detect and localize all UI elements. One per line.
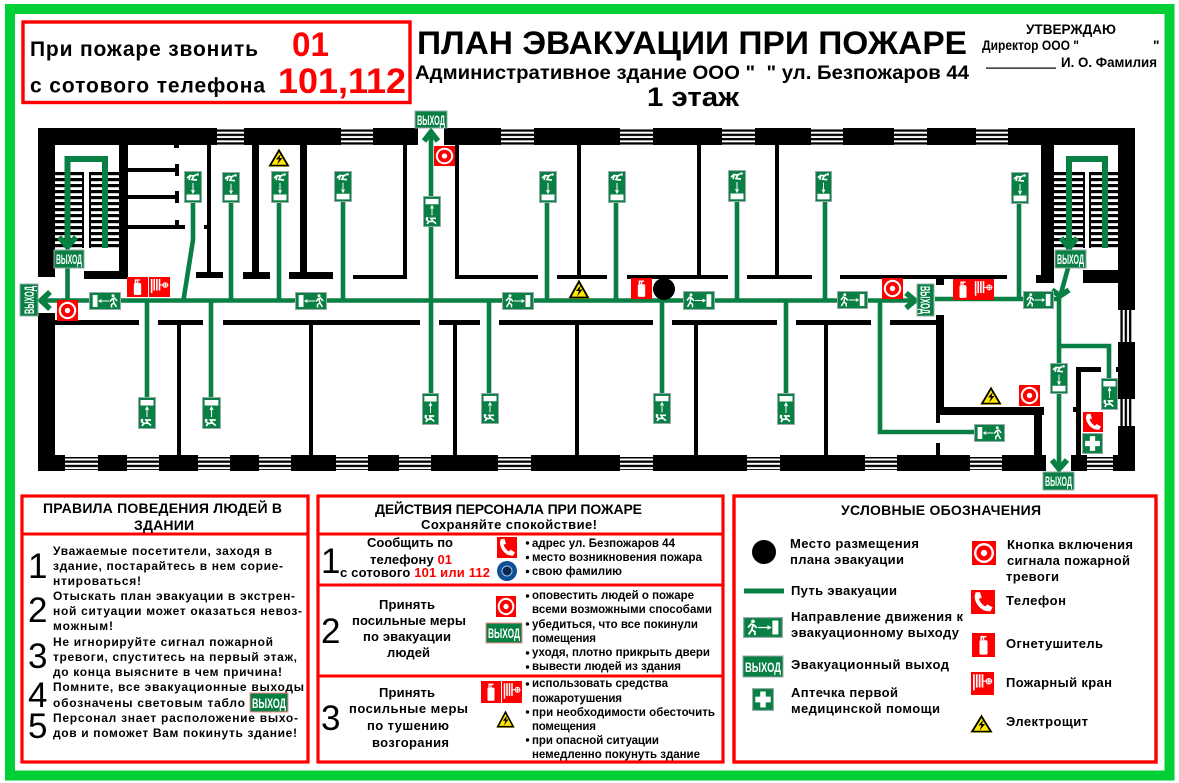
panel: staff actions: пожаротушения xyxy=(532,693,622,705)
panel: staff actions: вывести людей из здания xyxy=(532,661,681,673)
panel: behaviour rules: Персонал знает расположение выхо- xyxy=(53,711,298,725)
title: ПЛАН ЭВАКУАЦИИ ПРИ ПОЖАРЕ xyxy=(417,25,967,61)
panel: behaviour rules: 4 xyxy=(28,676,47,715)
subtitle: floor: 1 этаж xyxy=(647,82,740,112)
panel: staff actions: помещения xyxy=(532,721,596,733)
panel: staff actions: оповестить людей о пожаре xyxy=(532,590,694,602)
panel: staff actions: Принять xyxy=(379,597,435,612)
panel: behaviour rules: Не игнорируйте сигнал пожарной xyxy=(53,635,273,649)
emergency call box xyxy=(23,22,410,102)
panel: behaviour rules: Отыскать план эвакуации в экстрен- xyxy=(53,589,295,603)
panel: staff actions: всеми возможными способами xyxy=(532,604,712,616)
panel: staff actions: телефону 01 xyxy=(370,552,452,567)
emergency call box: с сотового телефона xyxy=(30,74,265,98)
panel: staff actions: посильные меры xyxy=(349,701,468,716)
panel: behaviour rules: 1 xyxy=(28,547,47,586)
panel: behaviour rules: можным! xyxy=(53,619,113,633)
panel: behaviour rules: Уважаемые посетители, заходя в xyxy=(53,544,272,558)
panel: legend: Аптечка первой xyxy=(791,685,898,700)
panel: staff actions: посильные меры xyxy=(352,613,466,628)
emergency call box: 01 xyxy=(292,26,329,64)
panel: staff actions: людей xyxy=(387,645,430,660)
panel: behaviour rules: 5 xyxy=(28,707,47,746)
panel: legend: ВЫХОД xyxy=(745,659,781,675)
floor plan xyxy=(38,128,1135,471)
panel: behaviour rules: обозначены световым табло xyxy=(53,696,245,710)
panel: staff actions: 3 xyxy=(321,699,340,738)
panel: staff actions: Сохраняйте спокойствие! xyxy=(421,517,597,532)
panel: staff actions: по тушению xyxy=(367,718,449,733)
panel: behaviour rules: 3 xyxy=(28,637,47,676)
exit signs xyxy=(20,111,1086,490)
panel: staff actions: 2 xyxy=(321,612,340,651)
emergency call box: 101,112 xyxy=(278,62,406,101)
approval block: " xyxy=(1153,38,1159,53)
panel: legend: Электрощит xyxy=(1006,714,1088,729)
building walls xyxy=(38,128,1135,471)
panel: legend: Направление движения к xyxy=(791,609,963,624)
exit signs: ВЫХОД xyxy=(1045,473,1072,489)
panel: staff actions xyxy=(318,496,723,762)
panel: behaviour rules: нтироваться! xyxy=(53,574,141,588)
panel: behaviour rules: Помните, все эвакуационные выходы xyxy=(53,680,304,694)
panel: staff actions: с сотового 101 или 112 xyxy=(340,565,490,580)
panel: behaviour rules: ЗДАНИИ xyxy=(134,517,194,533)
panel: staff actions: Сообщить по xyxy=(367,535,453,550)
subtitle: building: Административное здание ООО " " ул. Безпожаров 44 xyxy=(415,62,969,84)
panel: staff actions: адрес ул. Безпожаров 44 xyxy=(532,538,676,550)
panel: legend: Кнопка включения xyxy=(1007,537,1133,552)
fire equipment icons xyxy=(57,146,1103,453)
panel: staff actions: по эвакуации xyxy=(363,629,451,644)
panel: legend: Телефон xyxy=(1006,593,1066,608)
approval block: И. О. Фамилия xyxy=(1061,55,1157,70)
panel: staff actions: свою фамилию xyxy=(532,566,622,578)
panel: staff actions: ДЕЙСТВИЯ ПЕРСОНАЛА ПРИ ПОЖАРЕ xyxy=(375,500,642,517)
panel: legend: Место размещения xyxy=(790,536,919,551)
panel: staff actions: помещения xyxy=(532,633,596,645)
panel: behaviour rules: тревоги, спуститесь на первый этаж, xyxy=(53,650,297,664)
exit signs: ВЫХОД xyxy=(918,286,934,314)
panel: behaviour rules: ПРАВИЛА ПОВЕДЕНИЯ ЛЮДЕЙ В xyxy=(43,499,282,516)
approval block xyxy=(982,22,1159,70)
panel: staff actions: место возникновения пожара xyxy=(532,552,703,564)
exit signs: ВЫХОД xyxy=(21,286,37,314)
panel: behaviour rules: 2 xyxy=(28,591,47,630)
plan location marker xyxy=(653,278,675,300)
panel: behaviour rules: ной ситуации может оказаться невоз- xyxy=(53,604,302,618)
panel: staff actions: возгорания xyxy=(372,735,449,750)
panel: behaviour rules: до конца выясните в чем причина! xyxy=(53,665,282,679)
panel: legend: сигнала пожарной xyxy=(1007,553,1130,568)
exit signs: ВЫХОД xyxy=(417,112,445,128)
approval block: УТВЕРЖДАЮ xyxy=(1026,22,1116,37)
panel: staff actions: при необходимости обесточить xyxy=(532,707,715,719)
panel: behaviour rules xyxy=(22,496,308,762)
panel: staff actions: использовать средства xyxy=(532,678,669,690)
exit signs: ВЫХОД xyxy=(1057,251,1084,267)
panel: legend: Эвакуационный выход xyxy=(791,657,950,672)
panel: staff actions: немедленно покунуть здание xyxy=(532,749,700,761)
exit signs: ВЫХОД xyxy=(56,251,82,267)
windows xyxy=(65,128,1113,470)
panel: behaviour rules: ВЫХОД xyxy=(252,695,286,711)
panel: legend: тревоги xyxy=(1006,569,1059,584)
panel: legend: медицинской помощи xyxy=(791,701,940,716)
panel: staff actions: убедиться, что все покинули xyxy=(532,619,698,631)
panel: staff actions: ВЫХОД xyxy=(488,625,520,641)
panel: legend: плана эвакуации xyxy=(790,552,904,567)
panel: legend: УСЛОВНЫЕ ОБОЗНАЧЕНИЯ xyxy=(841,502,1041,518)
panel: staff actions: 1 xyxy=(321,542,340,581)
evacuation routes xyxy=(40,130,1109,470)
panel: staff actions: Принять xyxy=(379,685,435,700)
panel: staff actions: при опасной ситуации xyxy=(532,735,659,747)
panel: legend: Путь эвакуации xyxy=(791,583,897,598)
panel: behaviour rules: дов и поможет Вам покинуть здание! xyxy=(53,726,297,740)
panel: behaviour rules: здание, постарайтесь в нем сорие- xyxy=(53,559,283,573)
approval block: Директор ООО " xyxy=(982,38,1079,53)
emergency call box: При пожаре звонить xyxy=(30,38,258,61)
panel: staff actions: уходя, плотно прикрыть двери xyxy=(532,647,710,659)
direction signs xyxy=(90,170,1118,442)
panel: legend: Пожарный кран xyxy=(1006,675,1112,690)
panel: legend: эвакуационному выходу xyxy=(791,625,960,640)
panel: legend: Огнетушитель xyxy=(1006,636,1103,651)
stairs xyxy=(55,172,1118,248)
panel: legend xyxy=(734,496,1156,762)
